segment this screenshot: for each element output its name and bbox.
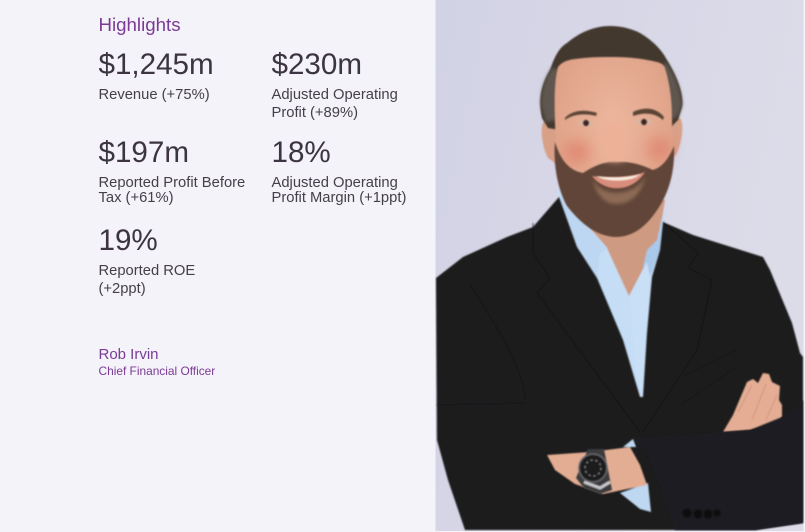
neck skin xyxy=(565,200,665,296)
shirt xyxy=(556,190,664,405)
forearm and cuff xyxy=(547,439,651,512)
photo background xyxy=(436,0,804,531)
metric: revenue xyxy=(98,48,214,103)
face skin xyxy=(555,57,673,237)
lapel seams xyxy=(533,222,712,432)
metric: reported profit before tax: $197m xyxy=(98,136,189,169)
metric: revenue: Revenue (+75%) xyxy=(98,87,210,103)
name and title: Chief Financial Officer xyxy=(98,364,215,378)
nose xyxy=(602,122,628,161)
sleeve buttons xyxy=(682,508,720,518)
right sleeve xyxy=(633,400,803,530)
metric: adjusted operating profit: $230m xyxy=(272,48,362,81)
portrait photo illustration xyxy=(436,0,804,531)
metric: adjusted operating profit: Profit (+89%) xyxy=(272,105,358,121)
metric: reported ROE: 19% xyxy=(98,224,158,257)
metric: adjusted operating profit margin xyxy=(272,136,406,206)
metric: reported ROE xyxy=(98,224,195,297)
metric: reported ROE: (+2ppt) xyxy=(98,281,146,297)
cheeks xyxy=(564,137,671,164)
beard xyxy=(555,142,674,237)
chin skin patch xyxy=(592,176,646,204)
eyes xyxy=(578,119,652,126)
metric: adjusted operating profit xyxy=(272,48,398,121)
hand xyxy=(723,373,782,432)
jacket xyxy=(436,197,803,530)
metric: reported profit before tax: Tax (+61%) xyxy=(98,190,174,206)
wristwatch xyxy=(576,449,612,494)
heading: Highlights: Highlights xyxy=(98,14,181,35)
metric: adjusted operating profit: Adjusted Operating xyxy=(272,87,398,103)
metric: adjusted operating profit margin: Adjusted Operating xyxy=(272,175,398,191)
metric: adjusted operating profit margin: Profit Margin (+1ppt) xyxy=(272,190,406,206)
ears xyxy=(542,117,682,165)
name and title: Rob Irvin xyxy=(98,346,159,363)
eyebrows xyxy=(565,109,664,120)
hair xyxy=(540,26,682,130)
teeth xyxy=(596,174,641,181)
head xyxy=(540,26,682,237)
grey temples xyxy=(541,62,682,122)
metric: revenue: $1,245m xyxy=(98,48,214,81)
metric: reported profit before tax: Reported Profit Before xyxy=(98,175,245,191)
mouth xyxy=(592,172,645,188)
name and title xyxy=(98,346,215,378)
shirt collar xyxy=(558,195,662,397)
panel: highlights text xyxy=(98,14,406,378)
metric: adjusted operating profit margin: 18% xyxy=(272,136,331,169)
metric: reported ROE: Reported ROE xyxy=(98,263,195,279)
metric: reported profit before tax xyxy=(98,136,245,206)
